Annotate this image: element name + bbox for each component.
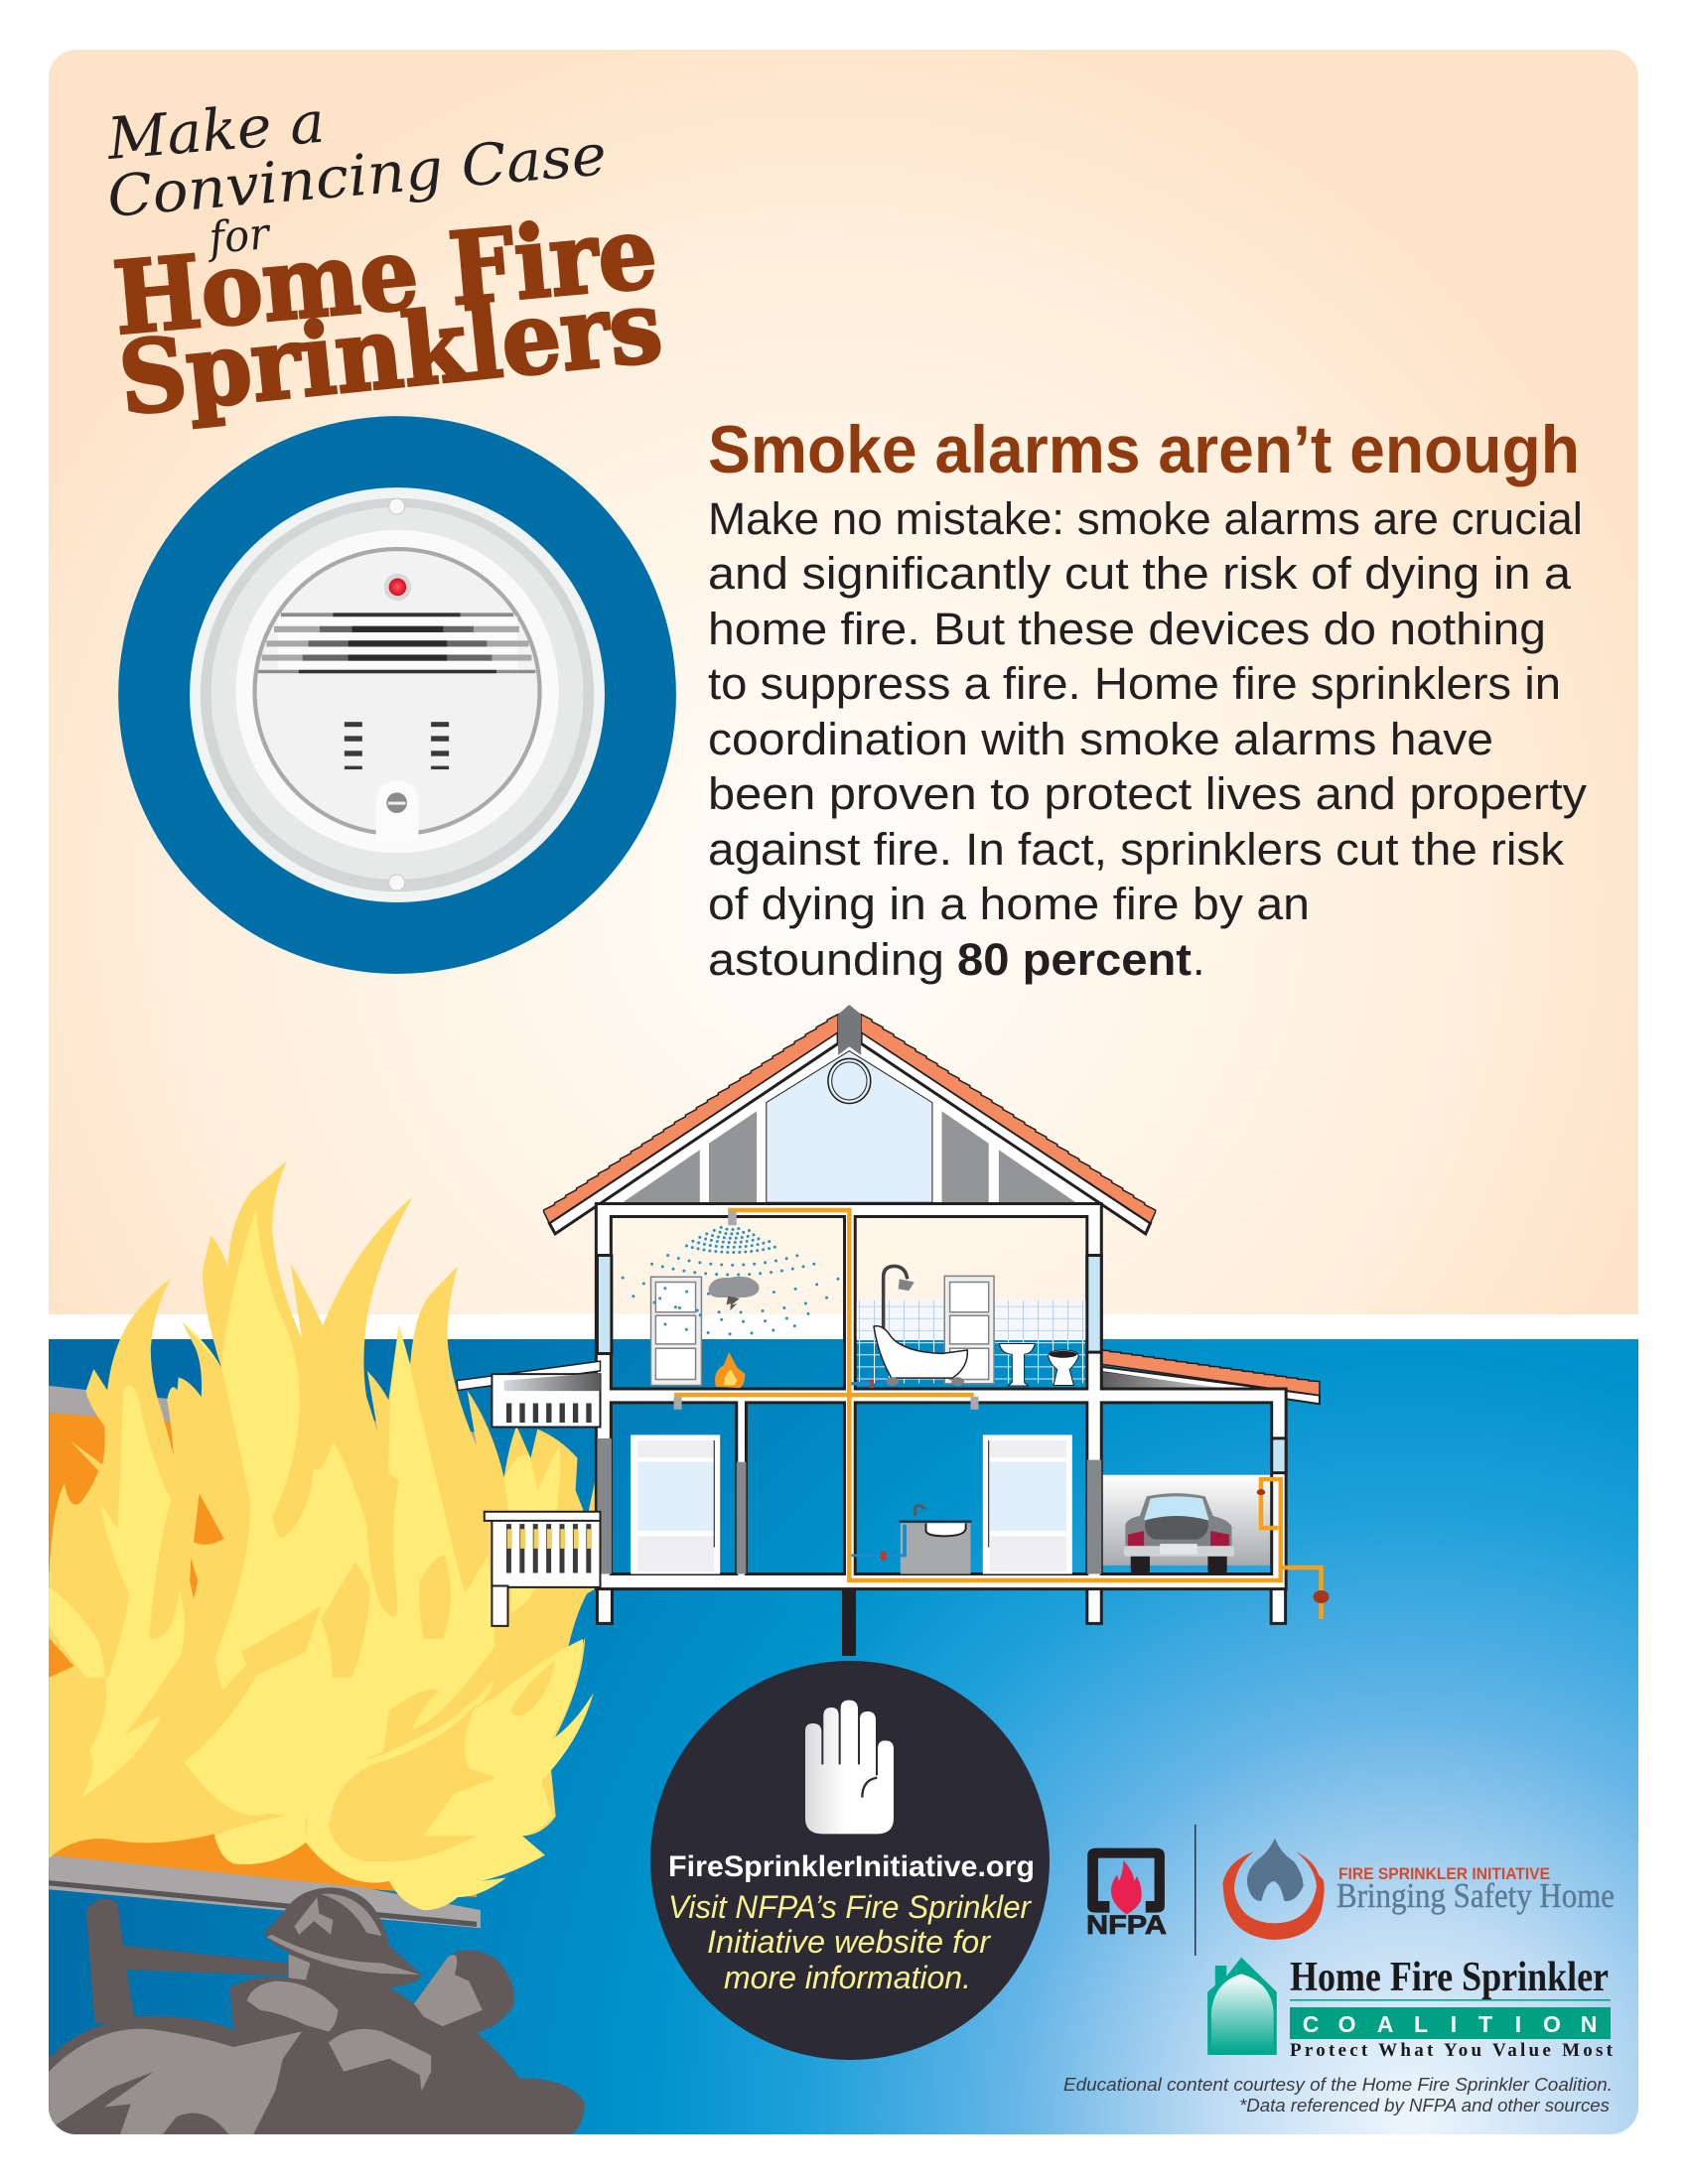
website description [668, 1889, 1032, 1995]
title: Sprinklers [114, 267, 667, 438]
website description: Initiative website for [707, 1924, 991, 1960]
house pillars [597, 1587, 1286, 1623]
firefighter carrying victim [49, 1887, 585, 2136]
garage roof [1099, 1350, 1320, 1404]
valves and sprinkler heads [674, 1211, 1330, 1603]
body text: home fire. But these devices do nothing [708, 604, 1546, 654]
helmet and face highlights [267, 1894, 420, 1979]
porch decks [457, 1361, 600, 1626]
body text: . [1193, 934, 1205, 985]
shower [884, 1266, 914, 1333]
icon: raised hand [805, 1701, 894, 1834]
body text: astounding [708, 934, 944, 985]
body text: and significantly cut the risk of dying in a [708, 548, 1572, 599]
lower porch [485, 1512, 600, 1626]
toilet [1049, 1350, 1078, 1386]
panel: blue lower area [49, 1339, 1638, 2135]
bathroom tiles [857, 1300, 1085, 1383]
alarm vents [258, 613, 535, 674]
logo: Fire Sprinkler Initiative [1222, 1839, 1615, 1940]
title: Convincing Case [105, 122, 609, 230]
title: Make a [104, 88, 327, 173]
water spray [623, 1227, 842, 1334]
website description: Visit NFPA’s Fire Sprinkler [668, 1889, 1032, 1925]
website description: more information. [724, 1960, 971, 1995]
fence post and rail [86, 1898, 287, 2023]
title: Home Fire [109, 194, 661, 357]
logo: Home Fire Sprinkler Coalition: COALITION [1303, 2011, 1597, 2037]
bathroom door [944, 1276, 994, 1384]
illustration: flames and firefighter [49, 1161, 599, 2136]
illustration: smoke alarm [118, 416, 676, 974]
logo: NFPA: NFPA [1086, 1910, 1167, 1940]
connector post [842, 1586, 856, 1656]
burning building [49, 1386, 481, 1928]
logo: Fire Sprinkler Initiative: Bringing Safety Home [1336, 1876, 1615, 1915]
alarm slots [345, 722, 449, 769]
source notes [1063, 2075, 1613, 2116]
logo: Home Fire Sprinkler Coalition: Home Fire Sprinkler [1290, 1955, 1609, 2000]
lower-wall gray sections [597, 1438, 1101, 1573]
alarm face [255, 549, 540, 834]
house frame [596, 1204, 1286, 1589]
alarm base [190, 487, 605, 902]
small fire [715, 1352, 745, 1388]
flames [49, 1161, 599, 1910]
logo: Home Fire Sprinkler Coalition [1207, 1955, 1614, 2061]
heading: smoke alarms: Smoke alarms aren’t enough [708, 412, 1580, 487]
alarm test tab [375, 780, 419, 836]
illustration: house cross-section [544, 1005, 1330, 1623]
blue circle [118, 416, 676, 974]
body text: Make no mistake: smoke alarms are crucial [708, 493, 1583, 544]
garage backdrop [1101, 1475, 1272, 1566]
body text: 80 percent [957, 934, 1192, 985]
source notes: *Data referenced by NFPA and other sources [1239, 2096, 1610, 2116]
sprinkler piping [674, 1210, 1322, 1619]
arms and legs highlights [49, 1981, 431, 2136]
sink [999, 1343, 1035, 1386]
body text: to suppress a fire. Home fire sprinklers in [708, 658, 1561, 709]
logo: NFPA [1086, 1848, 1167, 1940]
dark silhouette [49, 1887, 585, 2136]
victim face [414, 1955, 483, 2026]
title [104, 88, 667, 438]
attic [596, 1040, 1101, 1204]
car [1124, 1493, 1234, 1573]
bathtub [874, 1326, 967, 1386]
body text: of dying in a home fire by an [708, 879, 1310, 929]
body text [708, 493, 1588, 985]
body text: against fire. In fact, sprinklers cut the risk [708, 824, 1565, 875]
source notes: Educational content courtesy of the Home Fire Sprinkler Coalition. [1063, 2075, 1613, 2095]
title: for [205, 208, 273, 264]
main roof [544, 1005, 1156, 1234]
logo: Home Fire Sprinkler Coalition: Protect What You Value Most [1290, 2040, 1614, 2061]
white divider band [49, 1314, 1638, 1340]
side windows [597, 1256, 1286, 1473]
alarm LED [384, 574, 411, 601]
logo divider [1195, 1825, 1196, 1956]
call-to-action circle [650, 1661, 1050, 2060]
logo: Fire Sprinkler Initiative: FIRE SPRINKLER INITIATIVE [1338, 1865, 1550, 1883]
utility sink [851, 1506, 972, 1573]
body text: coordination with smoke alarms have [708, 714, 1493, 764]
smoke cloud [709, 1277, 759, 1310]
lower doors [631, 1434, 1072, 1573]
alarm screws [389, 498, 405, 890]
left upper door [651, 1277, 701, 1386]
website URL: FireSprinklerInitiative.org [668, 1850, 1035, 1883]
body text: been proven to protect lives and property [708, 768, 1588, 819]
panel: beige upper area [49, 50, 1638, 1314]
upper porch [457, 1361, 600, 1428]
